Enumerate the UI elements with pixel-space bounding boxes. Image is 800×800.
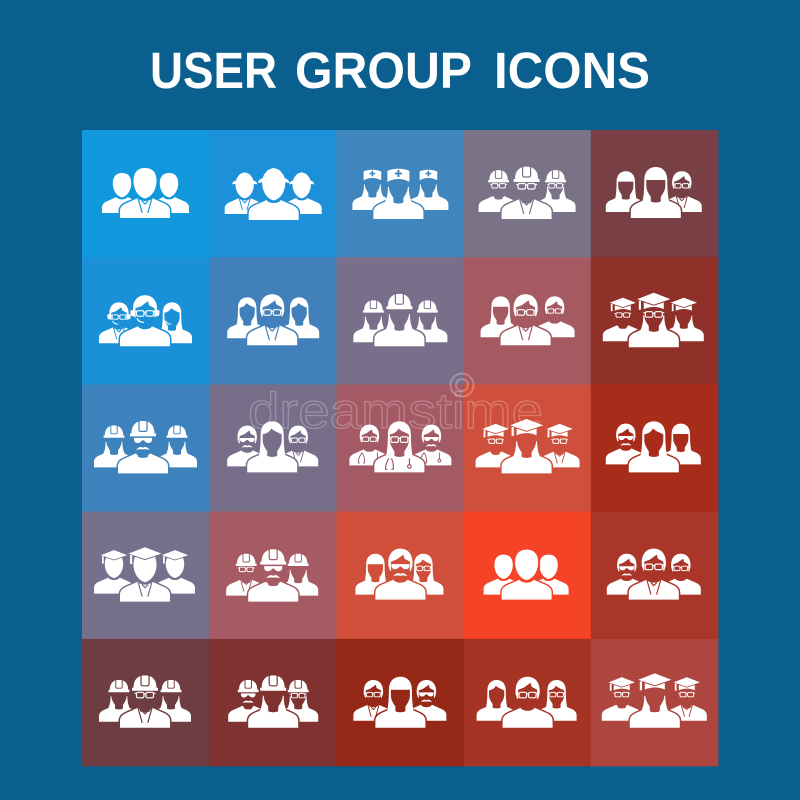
panel: icon grid [82, 130, 718, 766]
icon: three engineers with glasses [479, 166, 576, 219]
icon: woman between two men [353, 677, 446, 728]
icon: three graduates [476, 418, 580, 473]
panel: row 1 column 5, mixed team [591, 130, 718, 258]
icon: three doctors with stethoscopes [349, 421, 451, 472]
panel: row 3 column 5, mixed team [591, 384, 718, 512]
icon: support team with headsets [99, 295, 192, 346]
icon: three users in hats [225, 168, 322, 220]
icon: three plain users [102, 168, 189, 218]
icon: man with glasses and two women [227, 294, 319, 345]
icon: woman and two men with glasses [481, 294, 575, 345]
icon: two women and a man with glasses [606, 167, 702, 218]
icon: three graduates [602, 673, 707, 728]
panel: row 5 column 4, man between women [464, 639, 591, 766]
panel: row 4 column 1, graduates [82, 512, 210, 639]
icon: moustached man with two women [355, 549, 443, 600]
title: GROUP [295, 42, 472, 99]
panel: row 2 column 5, graduates [591, 257, 718, 385]
icon: three men with glasses [607, 549, 701, 600]
panel: row 1 column 1, plain users [82, 130, 210, 258]
icon: three nurses [352, 169, 448, 219]
title: ICONS [494, 42, 650, 99]
panel: row 2 column 4, mixed team [464, 257, 591, 385]
panel: row 5 column 5, graduates [591, 639, 718, 766]
icon: three mixed engineers [226, 549, 318, 602]
icon: moustached engineer with two women [94, 420, 197, 473]
icon: engineer in suit with two women [99, 675, 191, 728]
panel: row 5 column 2, engineers [209, 639, 337, 766]
icon: man with glasses and two women [477, 677, 577, 728]
panel: row 4 column 5, three men [591, 512, 718, 639]
panel: row 3 column 1, engineers [82, 384, 210, 512]
panel: row 1 column 3, nurses [336, 130, 464, 258]
icon: three mixed engineers [228, 675, 318, 728]
panel: row 4 column 2, engineers [209, 512, 337, 639]
panel: row 2 column 3, female engineers [336, 257, 464, 385]
panel: row 3 column 3, doctors [336, 384, 464, 512]
panel: row 3 column 4, graduates [464, 384, 591, 512]
title [150, 42, 650, 99]
icon: woman between two men [227, 421, 318, 472]
icon: three plain silhouettes [484, 550, 569, 600]
icon: three graduates [603, 292, 704, 347]
title: USER [150, 42, 277, 99]
panel: row 3 column 2, mixed team [209, 384, 337, 512]
panel: row 1 column 4, engineers [464, 130, 591, 258]
panel: row 4 column 4, plain users [464, 512, 591, 639]
panel: row 2 column 2, man between women [209, 257, 337, 385]
watermark: dreamstime [248, 383, 543, 439]
panel: row 2 column 1, call centre [82, 257, 210, 385]
panel: row 1 column 2, users with hats [209, 130, 337, 258]
icon: three graduates in caps [94, 547, 195, 602]
panel: row 5 column 1, engineers [82, 639, 210, 766]
panel: row 5 column 3, mixed team [336, 639, 464, 766]
icon: woman between man and woman [606, 421, 701, 472]
icon: three female engineers [353, 293, 447, 346]
panel: row 4 column 3, mixed team [336, 512, 464, 639]
